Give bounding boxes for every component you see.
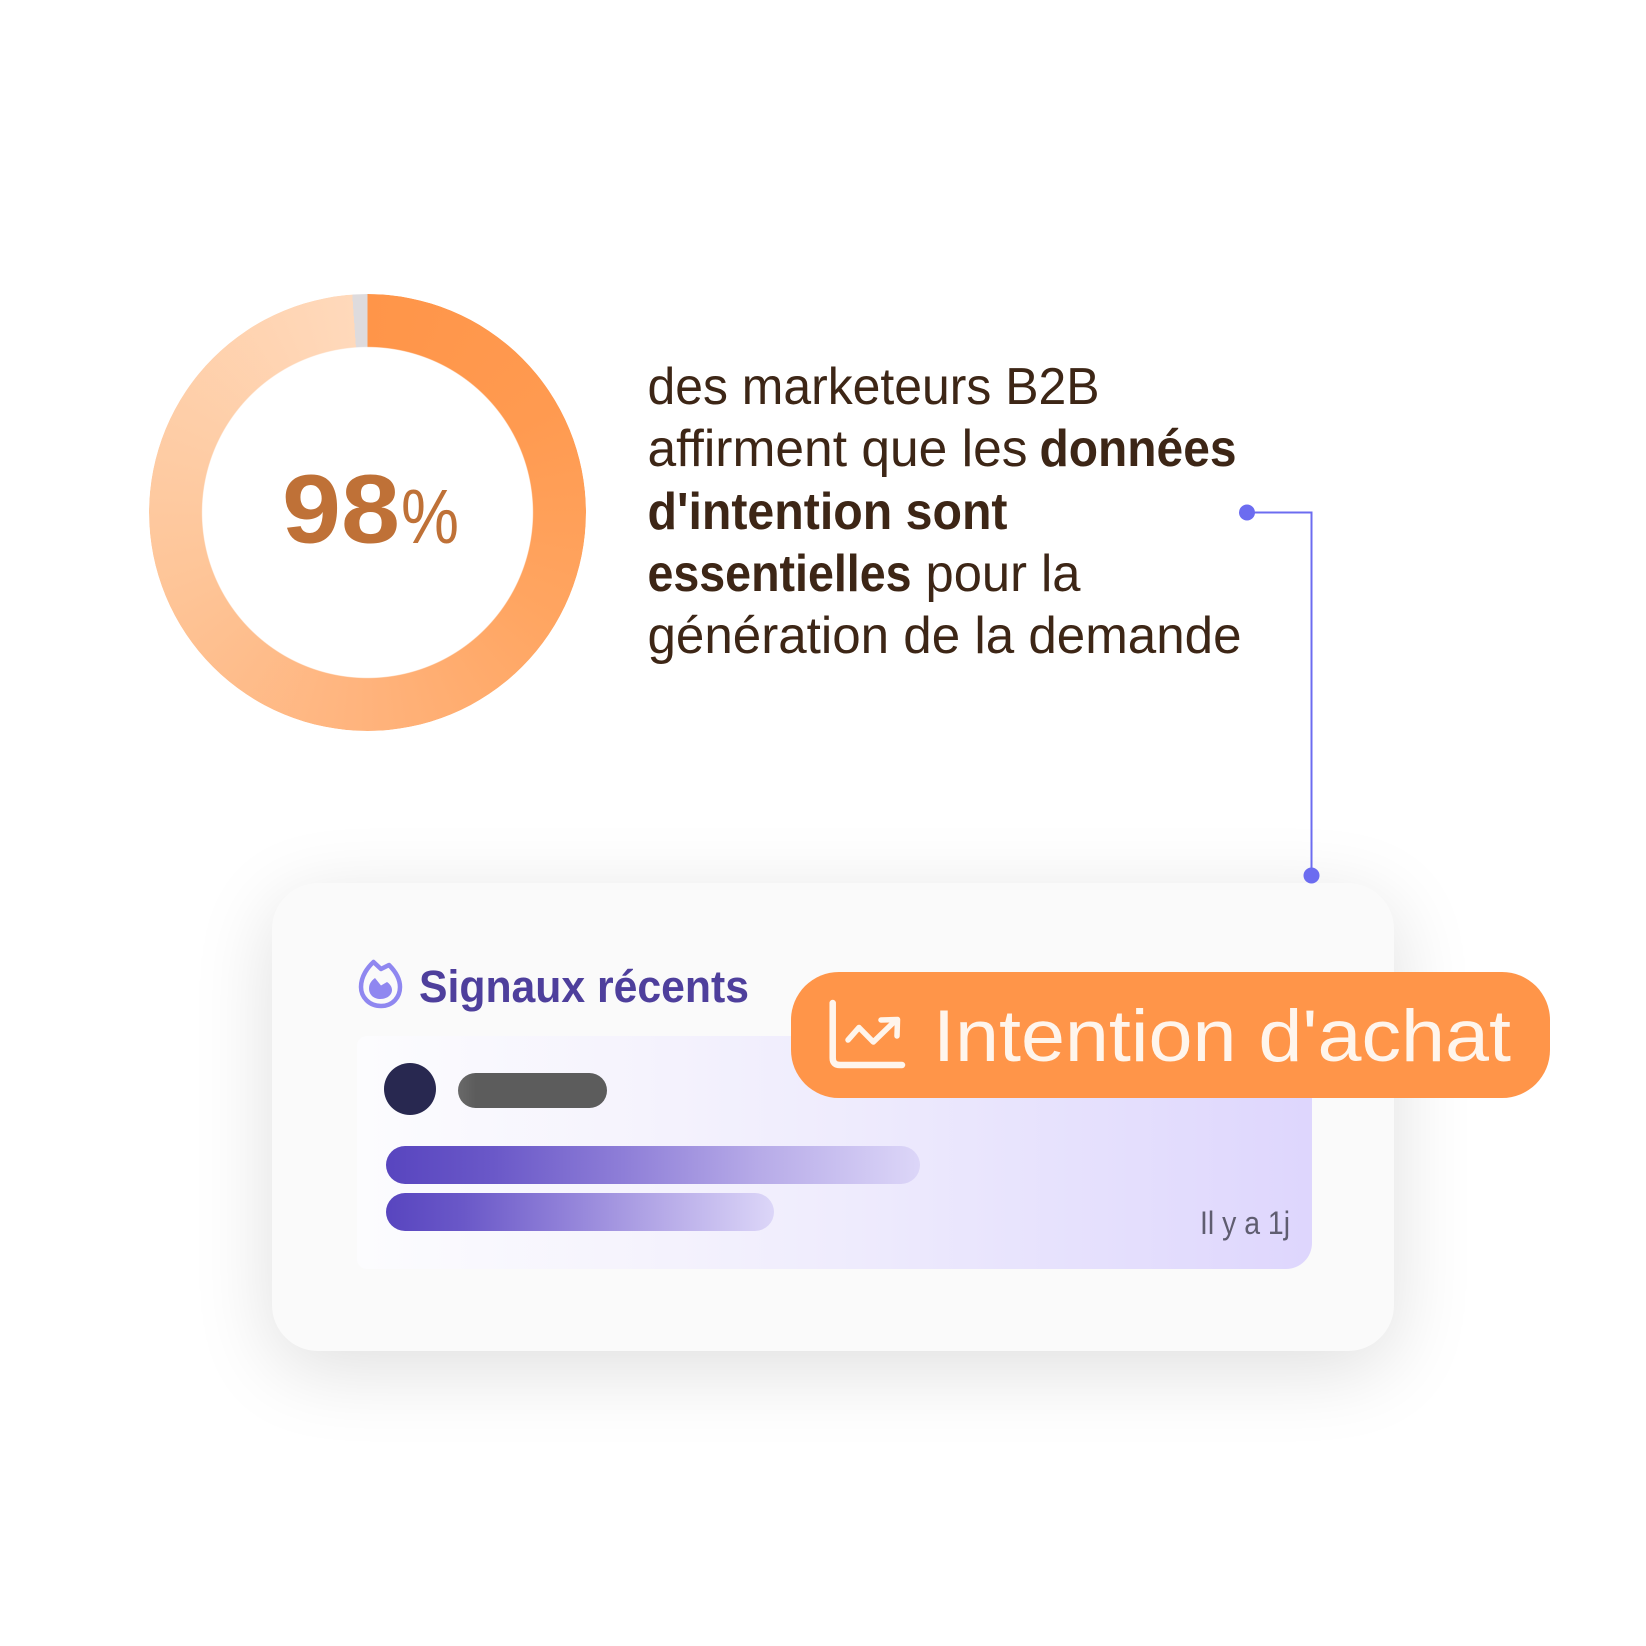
text block: description: données [1040, 420, 1236, 478]
timestamp: Il y a 1j [1200, 1205, 1290, 1241]
icon: growth chart [829, 1000, 906, 1068]
heading: Signaux récents: Signaux récents [419, 961, 749, 1012]
donut chart: 98% [149, 294, 586, 731]
badge: Intention d'achat [791, 972, 1550, 1098]
stat: 98% [282, 454, 459, 564]
panel: signals card [272, 883, 1394, 1351]
badge label: Intention d'achat [933, 996, 1511, 1077]
bar 1 [386, 1146, 920, 1184]
name placeholder [458, 1073, 607, 1108]
text block: description: génération de la demande [648, 607, 1242, 665]
connector line [1239, 504, 1320, 884]
icon: flame [358, 960, 402, 1008]
panel: signal row [357, 1036, 1312, 1269]
text block: description [648, 358, 1242, 665]
bar 2 [386, 1193, 774, 1231]
avatar [384, 1063, 436, 1115]
text block: description: affirment que les [648, 420, 1028, 478]
stat: 98%: % [401, 474, 459, 560]
text block: description: d'intention sont [648, 483, 1008, 541]
text block: description: essentielles [648, 545, 912, 603]
text block: description: pour la [926, 545, 1081, 603]
stat: 98%: 98 [282, 454, 400, 564]
text block: description: des marketeurs B2B [648, 358, 1100, 416]
